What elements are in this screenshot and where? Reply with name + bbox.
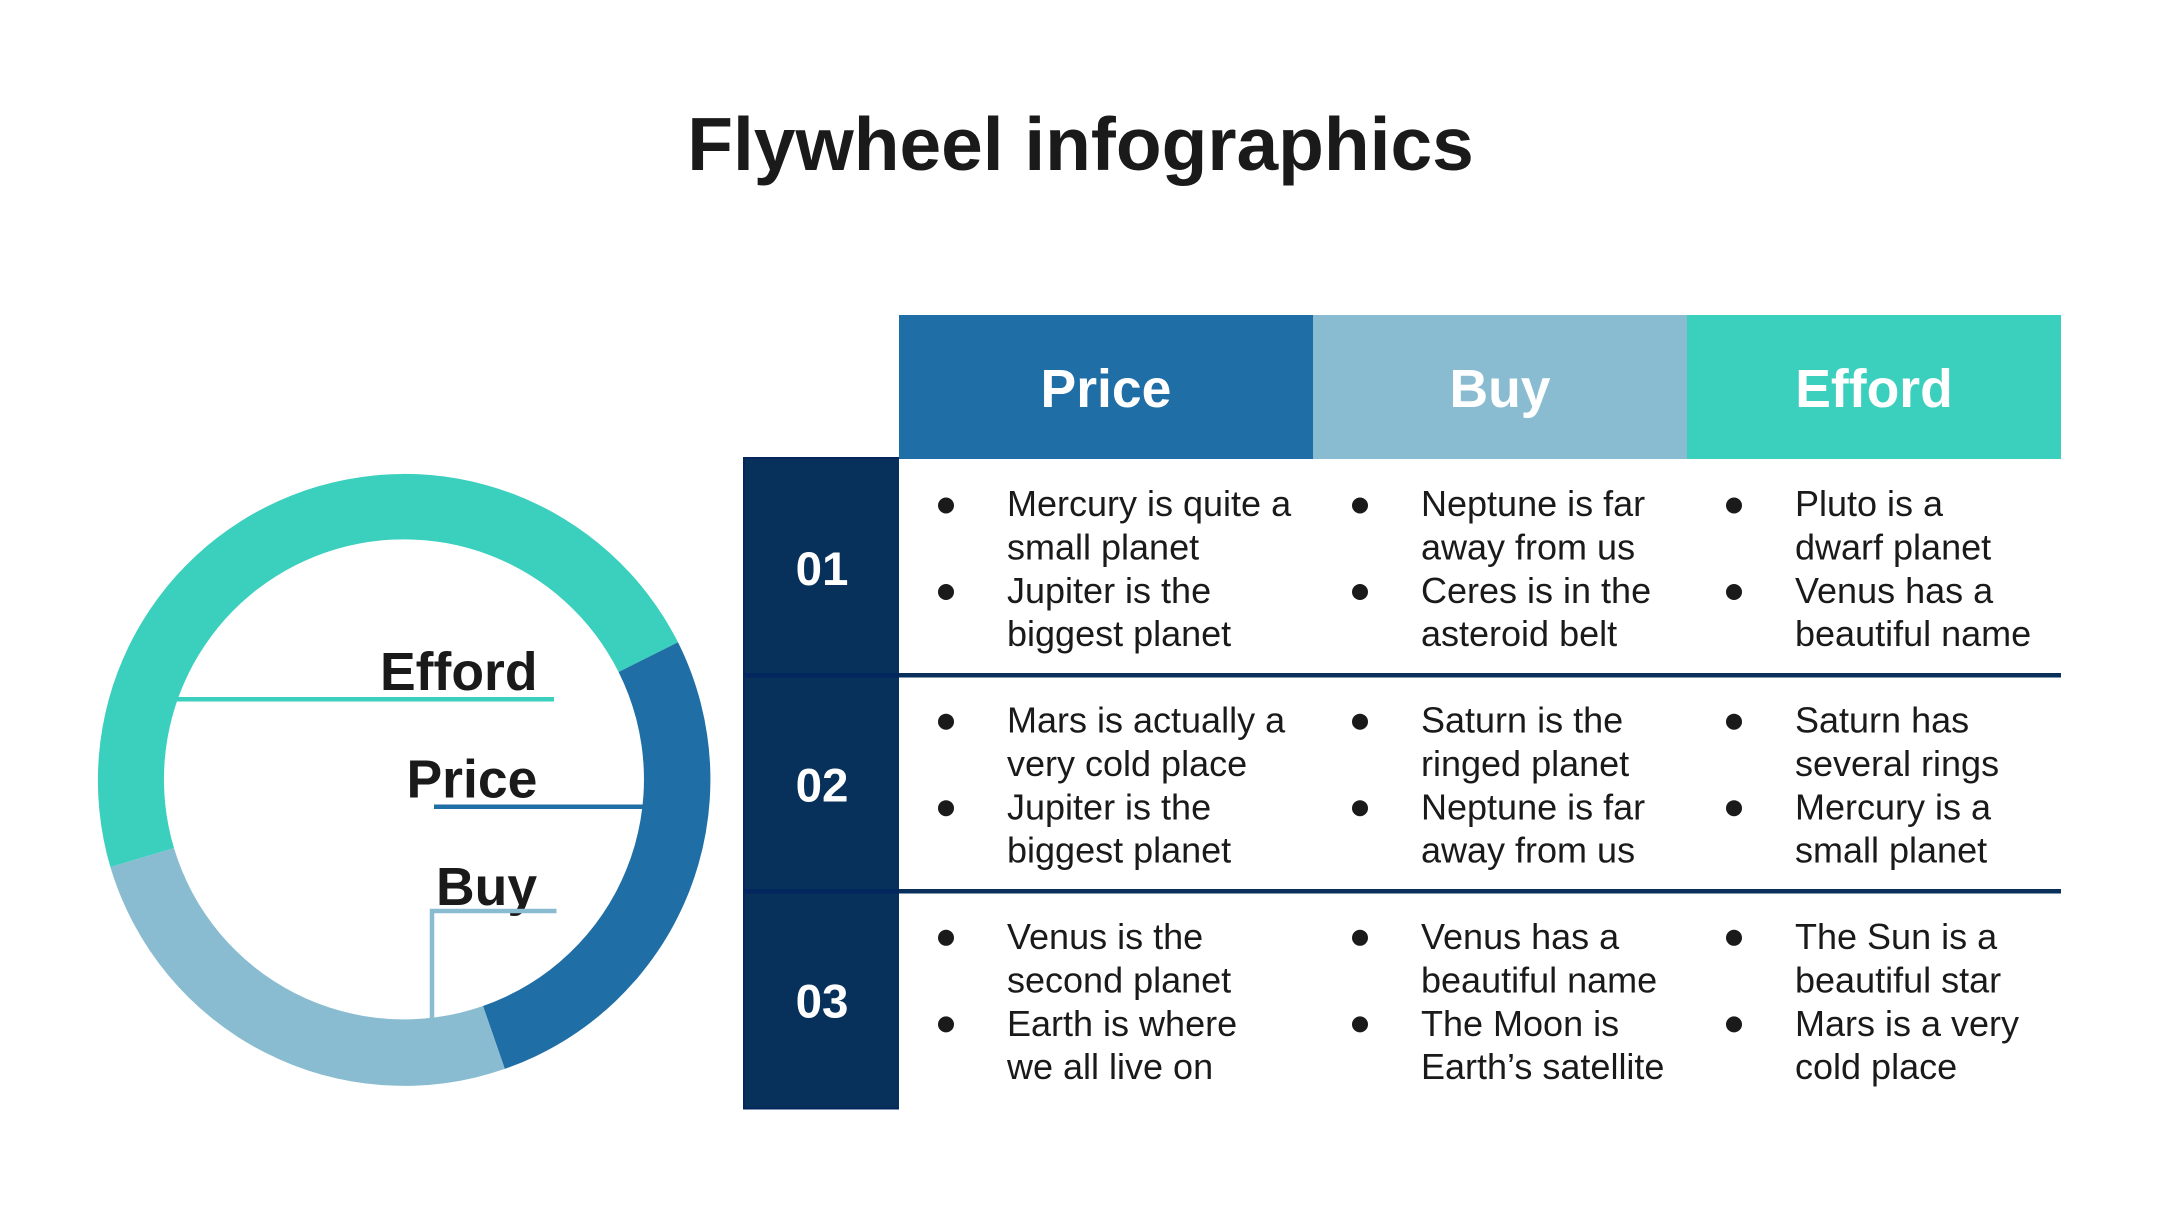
cell: row 3 Buy: [1352, 916, 1664, 1087]
cell: row 2 Efford: several rings: [1795, 743, 1999, 784]
label: Efford with leader line: [177, 643, 554, 702]
cell: row 3 Buy: Venus has a: [1421, 916, 1620, 957]
cell: row 1 Efford: Venus has a: [1795, 570, 1994, 611]
row number: 02: 02: [796, 760, 848, 812]
cell: row 2 Efford: Mercury is a: [1795, 786, 1992, 828]
column header: Buy: Buy: [1449, 360, 1551, 419]
cell: row 3 Buy: Earth’s satellite: [1421, 1046, 1664, 1087]
cell: row 3 Efford: The Sun is a: [1795, 916, 1998, 957]
cell: row 1 Price: Mercury is quite a: [1007, 483, 1292, 524]
cell: row 2 Price: Jupiter is the: [1007, 786, 1211, 828]
column header: Price: Price: [1041, 360, 1171, 419]
cell: row 3 Price: [938, 916, 1237, 1087]
cell: row 3 Efford: cold place: [1795, 1046, 1957, 1087]
row number: 03: [743, 892, 899, 1110]
cell: row 3 Price: Earth is where: [1007, 1003, 1237, 1044]
row number: 01: 01: [796, 543, 848, 596]
cell: row 1 Buy: [1352, 483, 1651, 654]
cell: row 1 Buy: Ceres is in the: [1421, 570, 1651, 611]
cell: row 3 Buy: The Moon is: [1421, 1003, 1619, 1044]
label: Efford with leader line: Efford: [380, 643, 538, 702]
cell: row 3 Buy: beautiful name: [1421, 960, 1657, 1000]
cell: row 2 Buy: ringed planet: [1421, 743, 1629, 784]
label: Buy with leader line: [432, 858, 556, 1018]
cell: row 2 Price: Mars is actually a: [1007, 700, 1286, 740]
cell: row 2 Price: biggest planet: [1007, 830, 1231, 870]
cell: row 1 Buy: Neptune is far: [1421, 483, 1645, 524]
cell: row 2 Price: [938, 700, 1286, 870]
label: Price with leader line: Price: [406, 750, 537, 810]
cell: row 3 Efford: beautiful star: [1795, 960, 2001, 1000]
ring segment: Buy: [110, 848, 505, 1086]
cell: row 2 Efford: Saturn has: [1795, 700, 1969, 740]
cell: row 3 Price: second planet: [1007, 960, 1231, 1000]
cell: row 1 Efford: Pluto is a: [1795, 483, 1944, 524]
cell: row 1 Efford: beautiful name: [1795, 613, 2031, 654]
cell: row 2 Buy: away from us: [1421, 830, 1635, 870]
cell: row 1 Efford: dwarf planet: [1795, 526, 1991, 568]
label: Buy with leader line: Buy: [436, 858, 537, 917]
row number: 01: [743, 457, 899, 676]
cell: row 1 Price: small planet: [1007, 526, 1199, 568]
row number: 03: 03: [796, 976, 848, 1028]
column header: Price: [899, 315, 1313, 459]
title: Flywheel infographics: [687, 102, 1474, 186]
cell: row 3 Efford: [1726, 916, 2019, 1087]
column header: Buy: [1313, 315, 1687, 459]
cell: row 1 Buy: asteroid belt: [1421, 613, 1617, 654]
cell: row 2 Buy: Saturn is the: [1421, 700, 1623, 740]
cell: row 1 Price: [938, 483, 1292, 654]
cell: row 3 Price: Venus is the: [1007, 916, 1203, 957]
label: Price with leader line: [406, 750, 645, 810]
ring segment: Efford: [98, 474, 678, 867]
cell: row 2 Buy: [1352, 700, 1645, 870]
cell: row 1 Buy: away from us: [1421, 526, 1635, 568]
cell: row 1 Price: biggest planet: [1007, 613, 1231, 654]
cell: row 1 Efford: [1726, 483, 2031, 654]
flywheel ring chart: [98, 474, 710, 1086]
column header: Efford: Efford: [1795, 360, 1953, 419]
ring segment: Price: [483, 642, 710, 1069]
cell: row 2 Efford: [1726, 700, 1999, 870]
row number: 02: [743, 676, 899, 892]
column header: Efford: [1687, 315, 2061, 459]
cell: row 3 Efford: Mars is a very: [1795, 1003, 2019, 1044]
cell: row 3 Price: we all live on: [1006, 1046, 1213, 1087]
cell: row 2 Buy: Neptune is far: [1421, 786, 1645, 828]
table: [743, 315, 2061, 1110]
cell: row 1 Price: Jupiter is the: [1007, 570, 1211, 611]
cell: row 2 Efford: small planet: [1795, 830, 1987, 870]
cell: row 2 Price: very cold place: [1007, 743, 1247, 784]
